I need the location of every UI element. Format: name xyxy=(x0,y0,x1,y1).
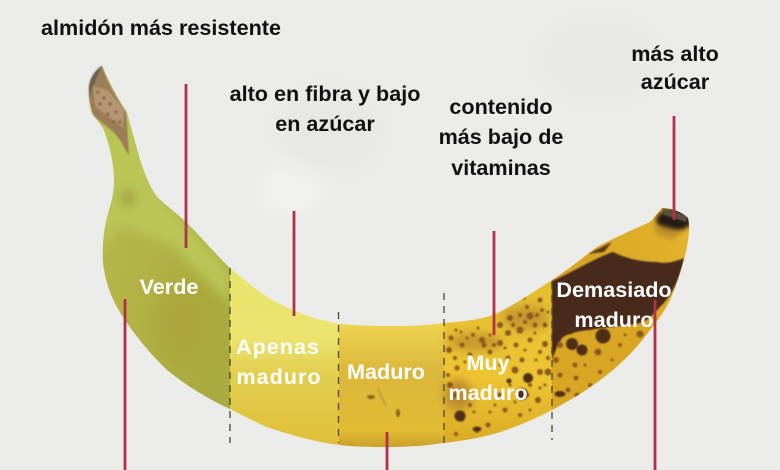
text: más alto azúcar: azúcar xyxy=(641,69,710,94)
segment: demasiado maduro xyxy=(552,200,692,415)
text: contenido más bajo de vitaminas: contenido xyxy=(449,94,553,119)
text: contenido más bajo de vitaminas: vitaminas xyxy=(451,155,551,180)
brown patch xyxy=(552,252,684,360)
text: más alto azúcar: más alto xyxy=(631,41,719,66)
text: alto en fibra y bajo en azúcar: alto en fibra y bajo xyxy=(230,81,420,106)
spot clouds xyxy=(444,306,549,411)
label: Muy maduro: maduro xyxy=(448,380,528,405)
segment: maduro xyxy=(339,320,444,450)
spots xyxy=(446,296,644,436)
stem end xyxy=(89,66,129,156)
label: Apenas maduro: Apenas xyxy=(236,334,320,359)
dashed dividers xyxy=(230,268,552,443)
banana tip xyxy=(656,209,692,231)
label: Demasiado maduro: maduro xyxy=(574,307,654,332)
label: Apenas maduro: maduro xyxy=(236,364,322,389)
label: Maduro: Maduro xyxy=(347,359,425,384)
text: alto en fibra y bajo en azúcar: en azúcar xyxy=(275,111,375,136)
label: Demasiado maduro: Demasiado xyxy=(556,277,672,302)
segment: apenas maduro xyxy=(230,260,339,450)
banana xyxy=(80,60,692,450)
segment: verde xyxy=(88,66,230,409)
label: Verde: Verde xyxy=(140,274,198,299)
text: contenido más bajo de vitaminas: más bajo de xyxy=(439,124,563,149)
label: Muy maduro: Muy xyxy=(466,350,510,375)
segment: muy maduro xyxy=(444,270,552,450)
pointer lines xyxy=(125,84,674,470)
heading: almidón más resistente: almidón más resistente xyxy=(41,15,281,40)
